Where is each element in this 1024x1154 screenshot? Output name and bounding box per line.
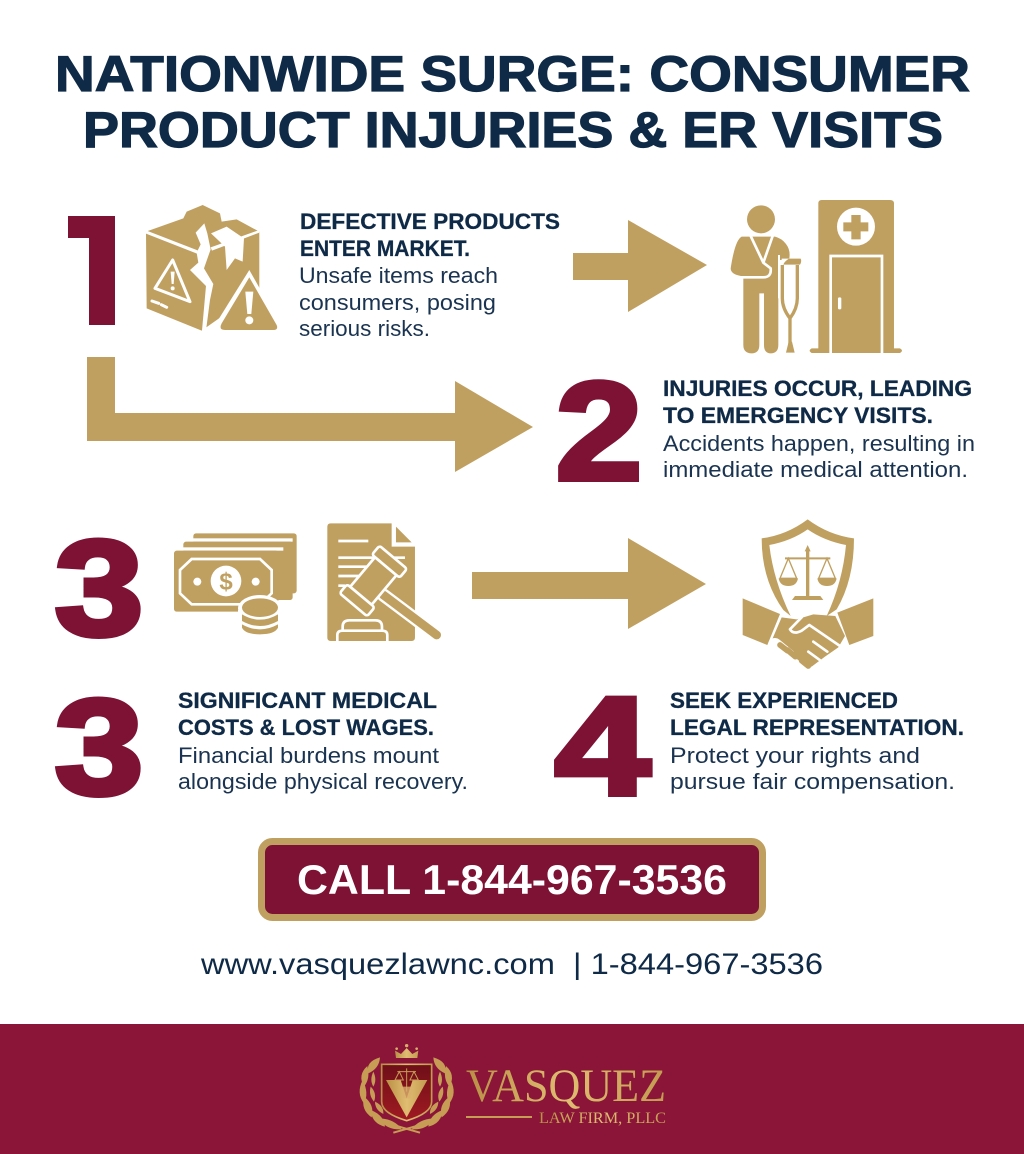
text block: step 2: Accidents happen, resulting in — [663, 431, 975, 456]
logo emblem — [360, 1044, 454, 1133]
call to action button — [262, 842, 762, 918]
contact line: www.vasquezlawnc.com | 1-844-967-3536 — [200, 948, 823, 981]
text block: step 4: Protect your rights and — [670, 743, 920, 768]
logo: Vasquez Law Firm: LAW FIRM, PLLC — [539, 1110, 666, 1127]
footer band — [0, 1024, 1024, 1154]
arrow: elbow from step 1 to step 2 — [87, 357, 533, 472]
text block: step 3: COSTS & LOST WAGES. — [178, 715, 434, 740]
icon: injured person and hospital door — [731, 200, 902, 353]
text block: step 4 — [670, 688, 964, 794]
text block: step 3: SIGNIFICANT MEDICAL — [178, 688, 437, 713]
text block: step 4: SEEK EXPERIENCED — [670, 688, 898, 713]
text block: step 1: Unsafe items reach — [299, 263, 498, 288]
text block: step 1: DEFECTIVE PRODUCTS — [300, 209, 560, 234]
text block: step 3 — [178, 688, 468, 794]
text block: step 2: TO EMERGENCY VISITS. — [663, 403, 933, 428]
text block: step 1 — [299, 209, 560, 341]
icon: shield with scales and handshake — [743, 519, 873, 668]
number 2: 2 — [556, 352, 642, 510]
icon: cash and coins — [174, 533, 297, 634]
text block: step 1: ENTER MARKET. — [300, 236, 470, 261]
number 3 lower: 3 — [54, 671, 144, 823]
icon: legal document and gavel — [327, 523, 437, 641]
text block: step 2: immediate medical attention. — [663, 457, 968, 482]
title — [55, 45, 970, 158]
arrow: step 3 to legal icon — [472, 538, 706, 629]
title: NATIONWIDE SURGE: CONSUMER — [55, 45, 970, 102]
text block: step 4: LEGAL REPRESENTATION. — [670, 715, 964, 740]
title: PRODUCT INJURIES & ER VISITS — [83, 101, 943, 158]
text block: step 2: INJURIES OCCUR, LEADING — [663, 376, 972, 401]
logo: Vasquez Law Firm — [360, 1044, 666, 1133]
arrow: step 1 to injury icon — [573, 220, 707, 312]
number 1: 1 — [55, 180, 135, 359]
text block: step 3: alongside physical recovery. — [178, 769, 468, 794]
text block: step 1: consumers, posing — [299, 290, 496, 315]
text block: step 2 — [663, 376, 975, 482]
logo: Vasquez Law Firm: VASQUEZ — [466, 1060, 666, 1112]
icon: cash and coins: $ — [219, 569, 233, 596]
text block: step 1: serious risks. — [299, 316, 430, 341]
text block: step 4: pursue fair compensation. — [670, 769, 955, 794]
call to action button: CALL 1-844-967-3536 — [297, 856, 727, 903]
text block: step 3: Financial burdens mount — [178, 743, 439, 768]
number 4: 4 — [554, 668, 651, 824]
number 3 upper: 3 — [54, 512, 144, 664]
icon: broken box with warnings — [146, 205, 283, 335]
